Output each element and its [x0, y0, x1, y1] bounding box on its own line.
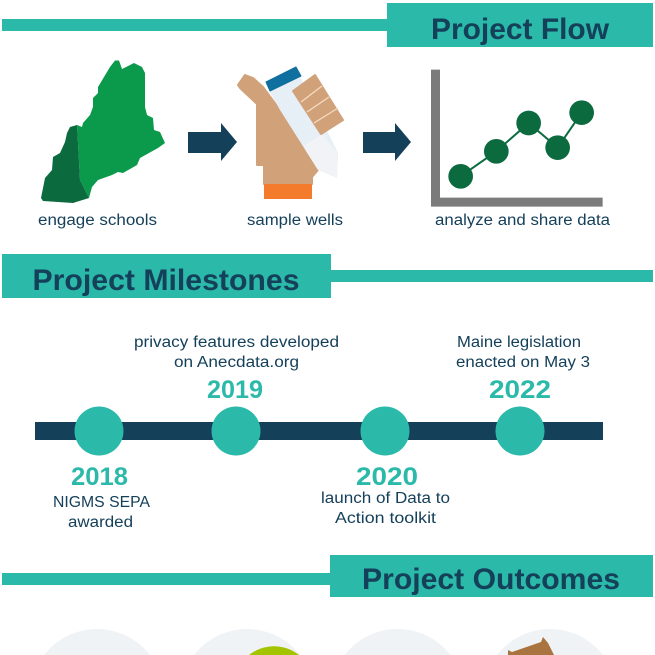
heading: Project Outcomes: Project Outcomes [362, 563, 620, 596]
milestone 2019 [134, 334, 339, 404]
heading: Project Milestones: Project Milestones [32, 264, 300, 297]
heading: Project Milestones [2, 254, 653, 298]
milestone 2022: enacted on May 3 [456, 354, 590, 371]
outcome circle 1 [44, 629, 150, 655]
icon: hand holding sample tube [238, 67, 343, 199]
outcome circle 2 with green icon [194, 629, 300, 655]
milestone 2022: Maine legislation [457, 334, 581, 351]
heading: Project Flow: Project Flow [431, 13, 610, 46]
caption: sample wells: sample wells [247, 212, 343, 229]
icon: map of Maine [41, 60, 165, 203]
timeline [35, 406, 603, 456]
outcome circle 4 with brown icon [497, 629, 603, 655]
milestone 2018: 2018 [71, 463, 128, 491]
milestone 2018 [53, 463, 151, 531]
milestone 2020 [321, 463, 450, 527]
heading: Project Flow [2, 3, 653, 47]
milestone 2019: 2019 [207, 376, 263, 404]
milestone 2022: 2022 [489, 376, 551, 404]
outcome circle 3 [344, 629, 450, 655]
arrow: to analyze data [363, 123, 411, 161]
milestone 2018: awarded [68, 514, 133, 531]
milestone 2022 [456, 334, 590, 404]
milestone 2018: NIGMS SEPA [53, 494, 151, 511]
arrow: to sample wells [188, 123, 237, 161]
milestone 2019: privacy features developed [134, 334, 339, 351]
milestone 2020: Action toolkit [335, 510, 437, 527]
milestone 2019: on Anecdata.org [174, 354, 299, 371]
milestone 2020: launch of Data to [321, 490, 450, 507]
caption: engage schools: engage schools [38, 212, 157, 229]
heading: Project Outcomes [2, 555, 653, 597]
milestone 2020: 2020 [356, 463, 418, 491]
caption: analyze and share data: analyze and share data [435, 212, 610, 229]
icon: line chart [431, 70, 603, 207]
